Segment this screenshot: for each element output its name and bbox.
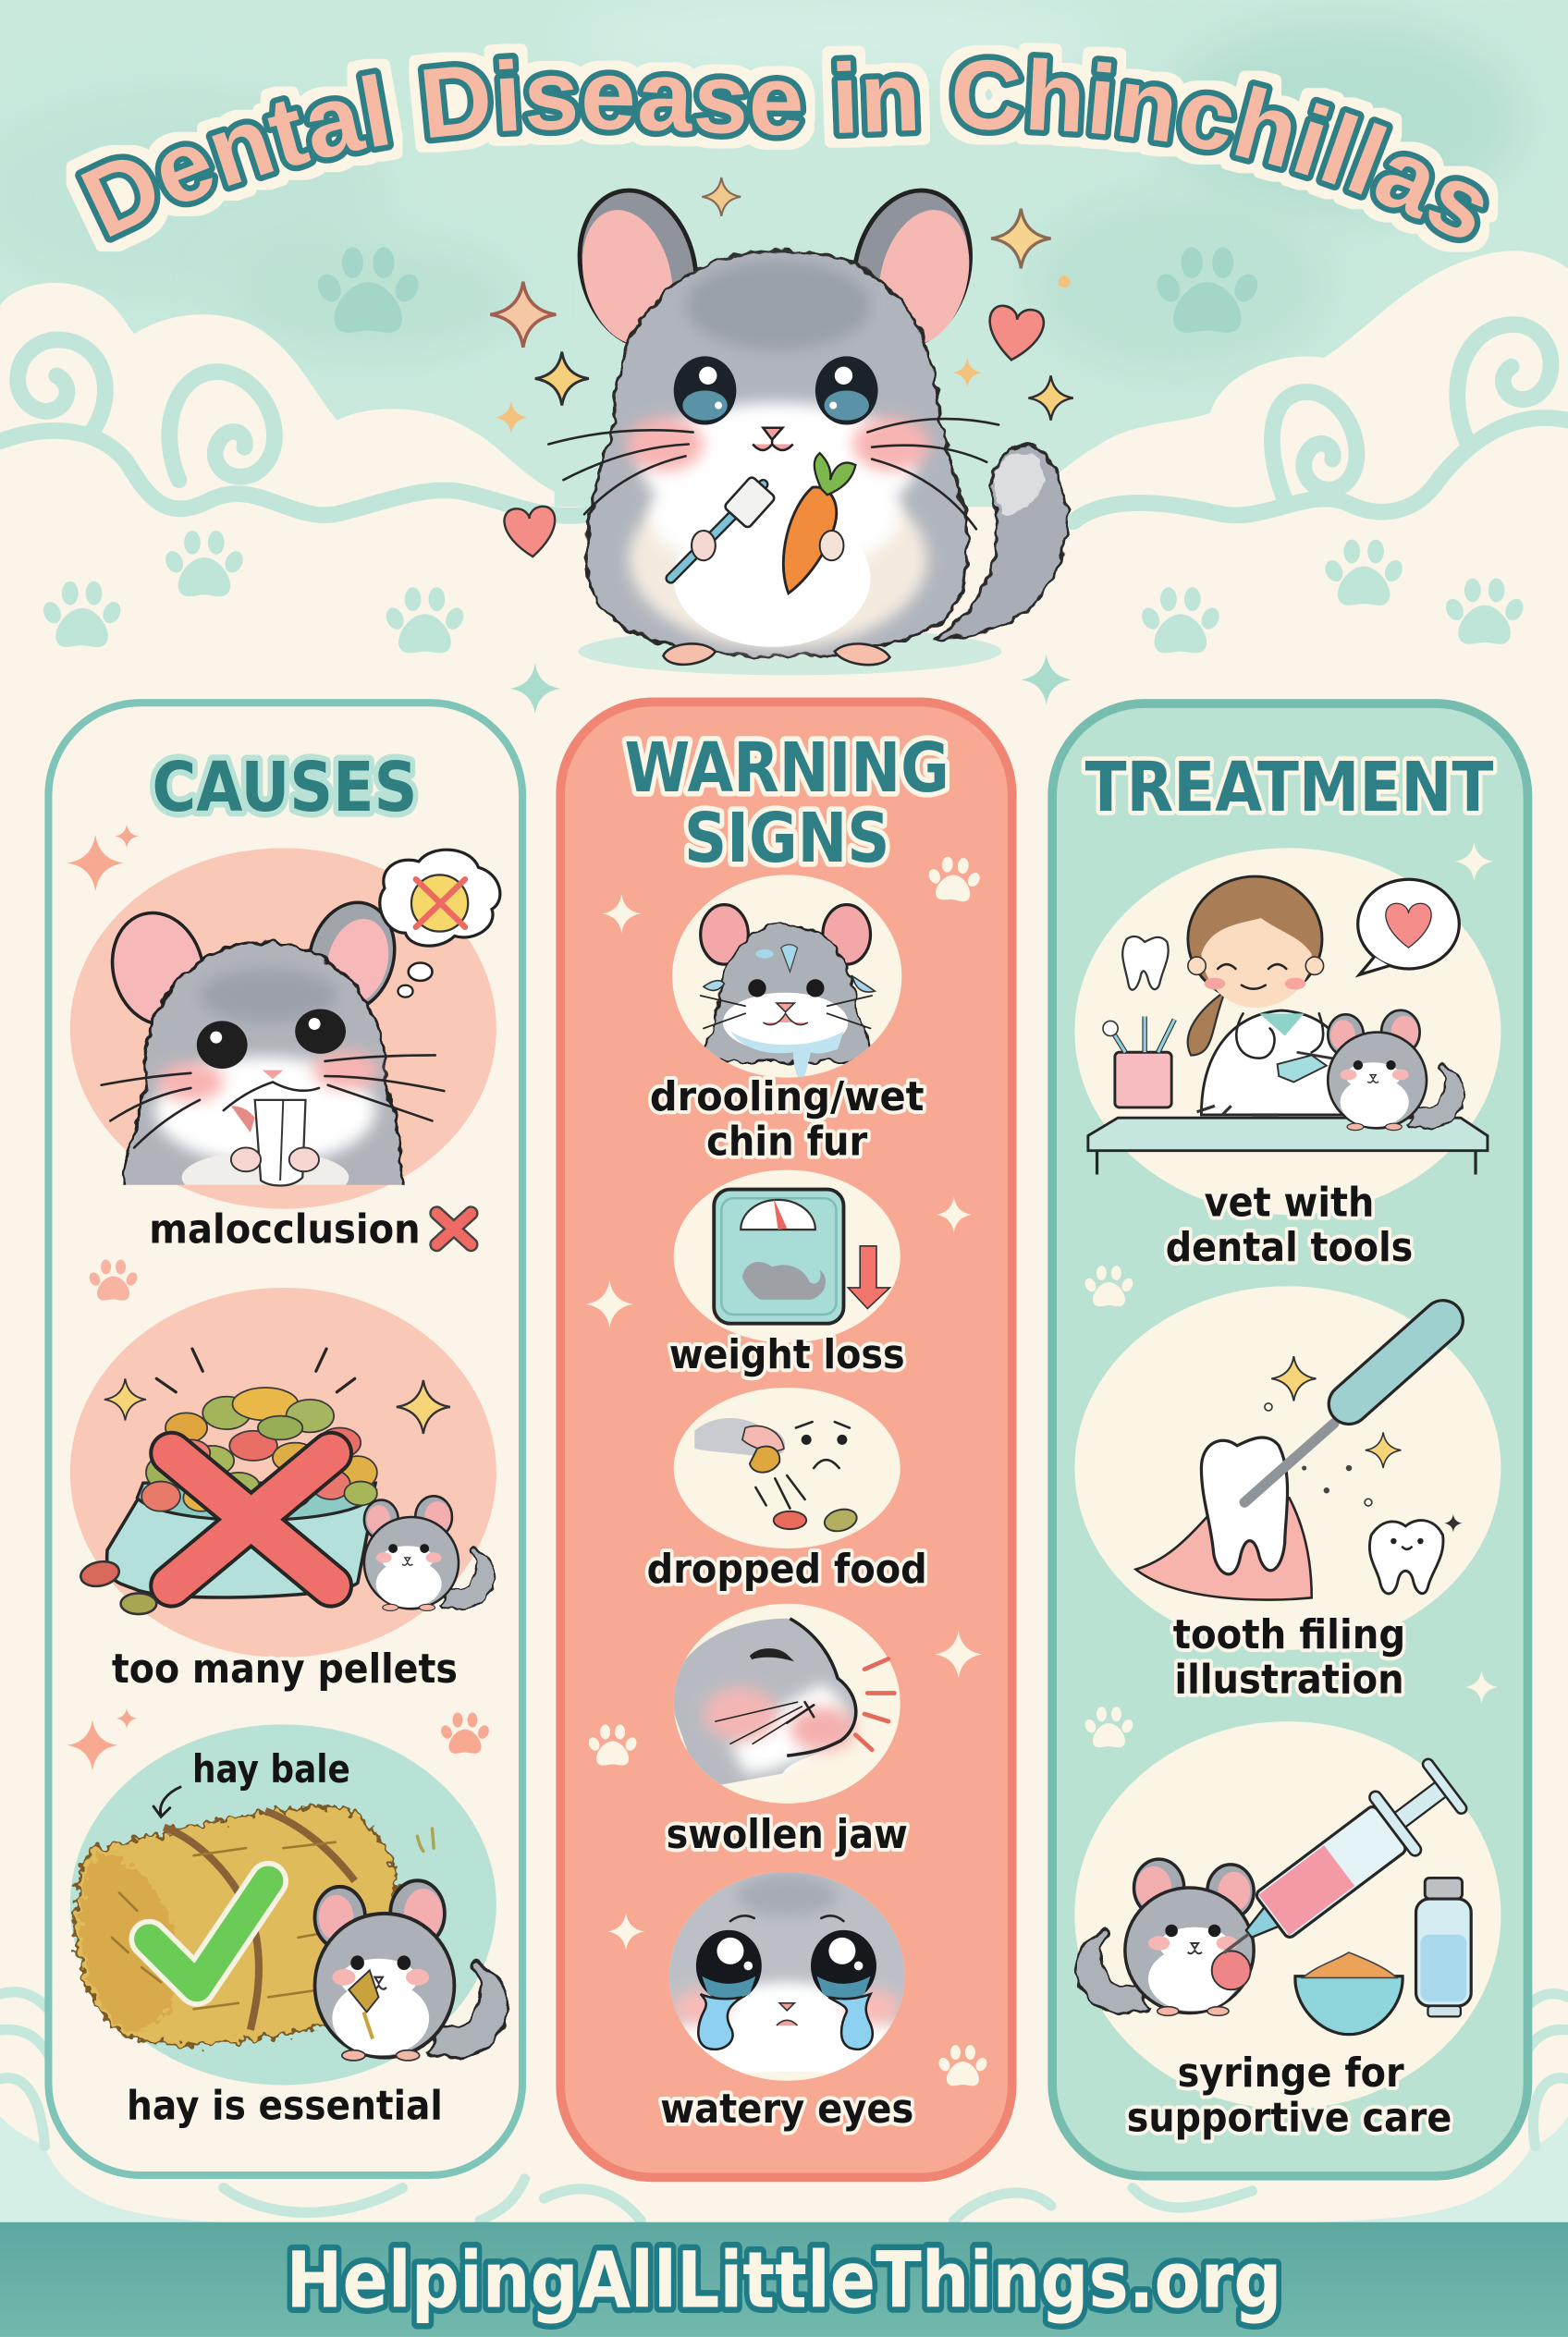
title: Dental Disease in Chinchillas [67, 43, 1498, 252]
heading: warning: WARNING [624, 728, 949, 808]
footer website text: HelpingAllLittleThings.org [287, 2235, 1281, 2326]
illustration: dropped food [694, 1418, 859, 1535]
icon: scale with chinchilla [714, 1190, 843, 1324]
watercolor sky band [0, 0, 1568, 507]
bottom cloud decoration [0, 1992, 1568, 2222]
caption: dropped food: dropped food [647, 1547, 927, 1593]
caption: tooth filing: tooth filing [1173, 1612, 1405, 1658]
caption: too many pellets: too many pellets [112, 1646, 458, 1693]
background paw prints [40, 247, 1526, 653]
caption: drooling/wet: drooling/wet [650, 1074, 925, 1120]
illustration: pellet bowl with red x [79, 1349, 494, 1614]
circle: dropped food [674, 1388, 900, 1548]
sparkles: causes top [67, 825, 139, 891]
heading: signs: SIGNS [684, 799, 889, 878]
decorations: treatment panel [1083, 842, 1498, 1747]
illustration: swollen jaw [670, 1619, 894, 1789]
caption: chin fur: chin fur [706, 1119, 868, 1165]
illustration: hay bale [75, 1806, 507, 2061]
footer band [0, 2222, 1568, 2337]
decorative swirls [0, 324, 1568, 521]
circle: weight loss [674, 1170, 900, 1343]
caption: weight loss: weight loss [669, 1332, 905, 1378]
circle: vet [1074, 848, 1501, 1215]
main chinchilla illustration [548, 178, 1067, 675]
circle: filing [1074, 1286, 1501, 1650]
sparkles and paw: hay section [67, 1708, 491, 1770]
panel: treatment [1052, 704, 1527, 2176]
illustration: malocclusion chinchilla [100, 893, 444, 1205]
illustration: syringe and supportive care [1077, 1752, 1472, 2035]
icon: down arrow [848, 1246, 889, 1309]
heading: causes: CAUSES [152, 748, 417, 827]
caption: supportive care: supportive care [1127, 2095, 1452, 2141]
cream clouds [0, 251, 1568, 745]
decorations: warning panel sparkles and paws [586, 855, 989, 2086]
caption: illustration: illustration [1174, 1657, 1404, 1703]
panel: warning signs [560, 702, 1012, 2177]
icon: paw print [87, 1260, 140, 1301]
caption: syringe for: syringe for [1178, 2050, 1404, 2097]
heading: treatment: TREATMENT [1085, 748, 1494, 827]
circle: drooling [672, 875, 901, 1078]
illustration: watery eyes face [669, 1872, 905, 2081]
icon: red x [436, 1213, 471, 1244]
caption: malocclusion: malocclusion [149, 1207, 421, 1254]
caption: hay bale: hay bale [192, 1746, 350, 1792]
illustration: tooth filing [1135, 1320, 1463, 1600]
caption: swollen jaw: swollen jaw [667, 1812, 908, 1858]
caption: watery eyes: watery eyes [660, 2086, 913, 2133]
icon: thought bubble with crossed food [380, 850, 500, 997]
sparkles and hearts around chinchilla [490, 177, 1073, 714]
circle: malocclusion background [70, 848, 496, 1209]
panel: causes [48, 703, 522, 2175]
caption: dental tools: dental tools [1166, 1225, 1413, 1271]
icon: speech bubble with heart [1358, 879, 1459, 974]
caption: vet with: vet with [1205, 1181, 1374, 1227]
circle: syringe [1074, 1721, 1501, 2109]
illustration: vet with chinchilla [1088, 876, 1488, 1174]
icon: tooth [1122, 936, 1169, 990]
circle: hay background [70, 1724, 496, 2085]
circle: pellets background [70, 1288, 496, 1658]
circle: swollen jaw [674, 1604, 900, 1804]
illustration: drooling chinchilla [701, 905, 875, 1078]
caption: hay is essential: hay is essential [127, 2084, 443, 2130]
arrow: hay bale pointer [153, 1787, 180, 1817]
